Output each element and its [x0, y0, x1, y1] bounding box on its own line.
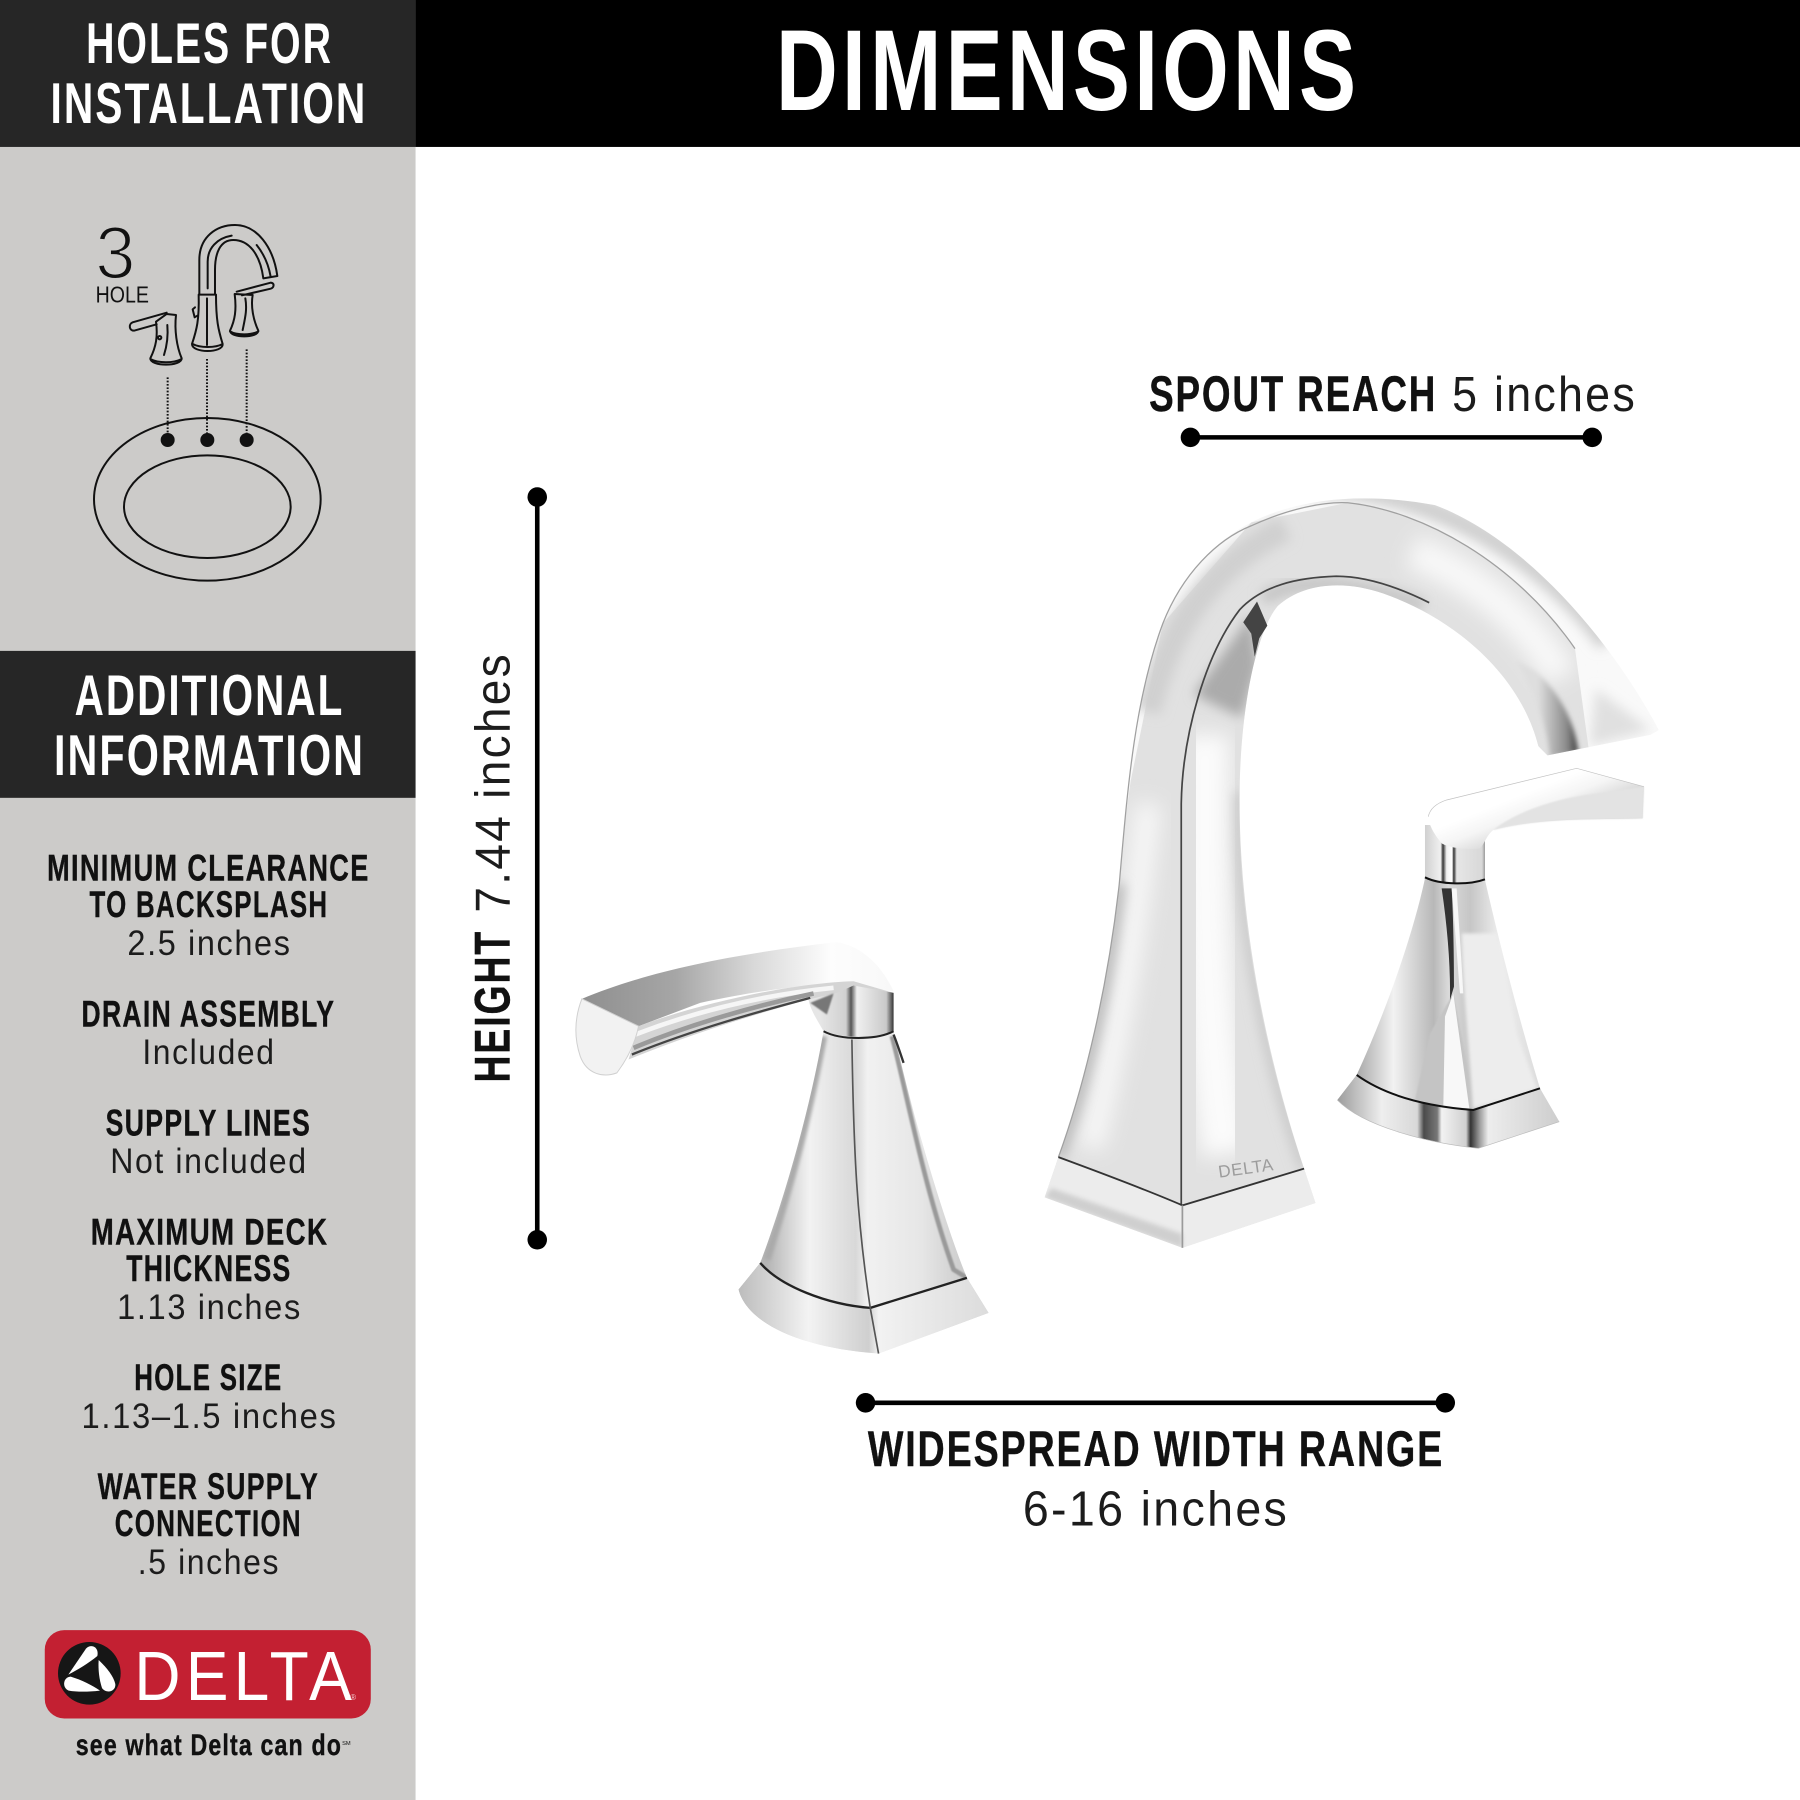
- text block: supply lines: [106, 1102, 311, 1181]
- icon: left handle: [130, 313, 182, 365]
- icon: three hole sink diagram: [94, 211, 321, 581]
- text block: supply lines: SUPPLY LINES: [106, 1102, 311, 1143]
- heading: holes for installation: HOLES FOR: [86, 12, 333, 76]
- heading: additional information: ADDITIONAL: [75, 664, 344, 728]
- text block: hole size: [82, 1357, 338, 1436]
- dimension: widespread width range: 6-16 inches: [1023, 1482, 1289, 1537]
- dimension: spout reach: 5 inches: [1452, 367, 1637, 422]
- heading: additional information: INFORMATION: [54, 724, 365, 788]
- faucet: left handle: [576, 942, 994, 1360]
- text block: water supply connection: WATER SUPPLY: [98, 1466, 319, 1507]
- panel: left sidebar: [0, 0, 416, 1800]
- text block: maximum deck thickness: THICKNESS: [126, 1248, 292, 1289]
- icon: delta triangle mark: [58, 1642, 121, 1705]
- dimension: widespread width range: WIDESPREAD WIDTH RANGE: [868, 1420, 1444, 1477]
- text block: minimum clearance: MINIMUM CLEARANCE: [47, 847, 370, 888]
- text block: water supply connection: CONNECTION: [115, 1503, 302, 1544]
- logo: delta: [45, 1630, 371, 1762]
- text block: maximum deck thickness: [91, 1211, 328, 1327]
- dimension: spout reach: SPOUT REACH: [1149, 365, 1437, 422]
- title: dimensions: DIMENSIONS: [776, 7, 1360, 135]
- label: 3 hole: 3: [95, 211, 135, 294]
- text block: minimum clearance: [47, 847, 370, 963]
- text block: hole size: 1.13–1.5 inches: [82, 1396, 338, 1436]
- text block: drain assembly: [82, 993, 335, 1072]
- label: 3 hole: HOLE: [96, 281, 149, 307]
- text block: water supply connection: .5 inches: [138, 1542, 280, 1582]
- logo: delta: see what Delta can do: [76, 1729, 342, 1762]
- text block: hole size: HOLE SIZE: [134, 1357, 282, 1398]
- text block: maximum deck thickness: 1.13 inches: [117, 1287, 302, 1327]
- text block: minimum clearance: TO BACKSPLASH: [90, 884, 328, 925]
- heading: additional information: [0, 651, 416, 798]
- faucet: centre spout: [1033, 482, 1676, 1263]
- text block: minimum clearance: 2.5 inches: [127, 923, 292, 963]
- text block: drain assembly: Included: [142, 1032, 276, 1072]
- heading: holes for installation: [0, 0, 416, 147]
- logo: delta: DELTA: [134, 1637, 357, 1715]
- title: dimensions: [416, 0, 1800, 147]
- label: delta engraving: DELTA: [1217, 1154, 1275, 1182]
- icon: sink basin: [94, 418, 321, 581]
- dimension: widespread width range: [856, 1393, 1455, 1537]
- label: 3 hole: [95, 211, 149, 307]
- text block: maximum deck thickness: MAXIMUM DECK: [91, 1211, 328, 1252]
- text block: water supply connection: [98, 1466, 319, 1582]
- faucet: right handle: [1330, 768, 1644, 1153]
- heading: holes for installation: INSTALLATION: [51, 72, 367, 136]
- logo: delta: ®: [350, 1693, 356, 1702]
- logo: delta: SM: [342, 1741, 351, 1747]
- dimension: height: [464, 487, 547, 1250]
- icon: dotted guide lines: [168, 349, 247, 433]
- dimension: height: 7.44 inches: [466, 652, 521, 913]
- dimension: spout reach: [1149, 365, 1637, 447]
- text block: drain assembly: DRAIN ASSEMBLY: [82, 993, 335, 1034]
- icon: right handle: [230, 283, 274, 336]
- dimension: height: HEIGHT: [464, 930, 521, 1083]
- text block: supply lines: Not included: [110, 1141, 308, 1181]
- icon: centre spout: [192, 225, 277, 351]
